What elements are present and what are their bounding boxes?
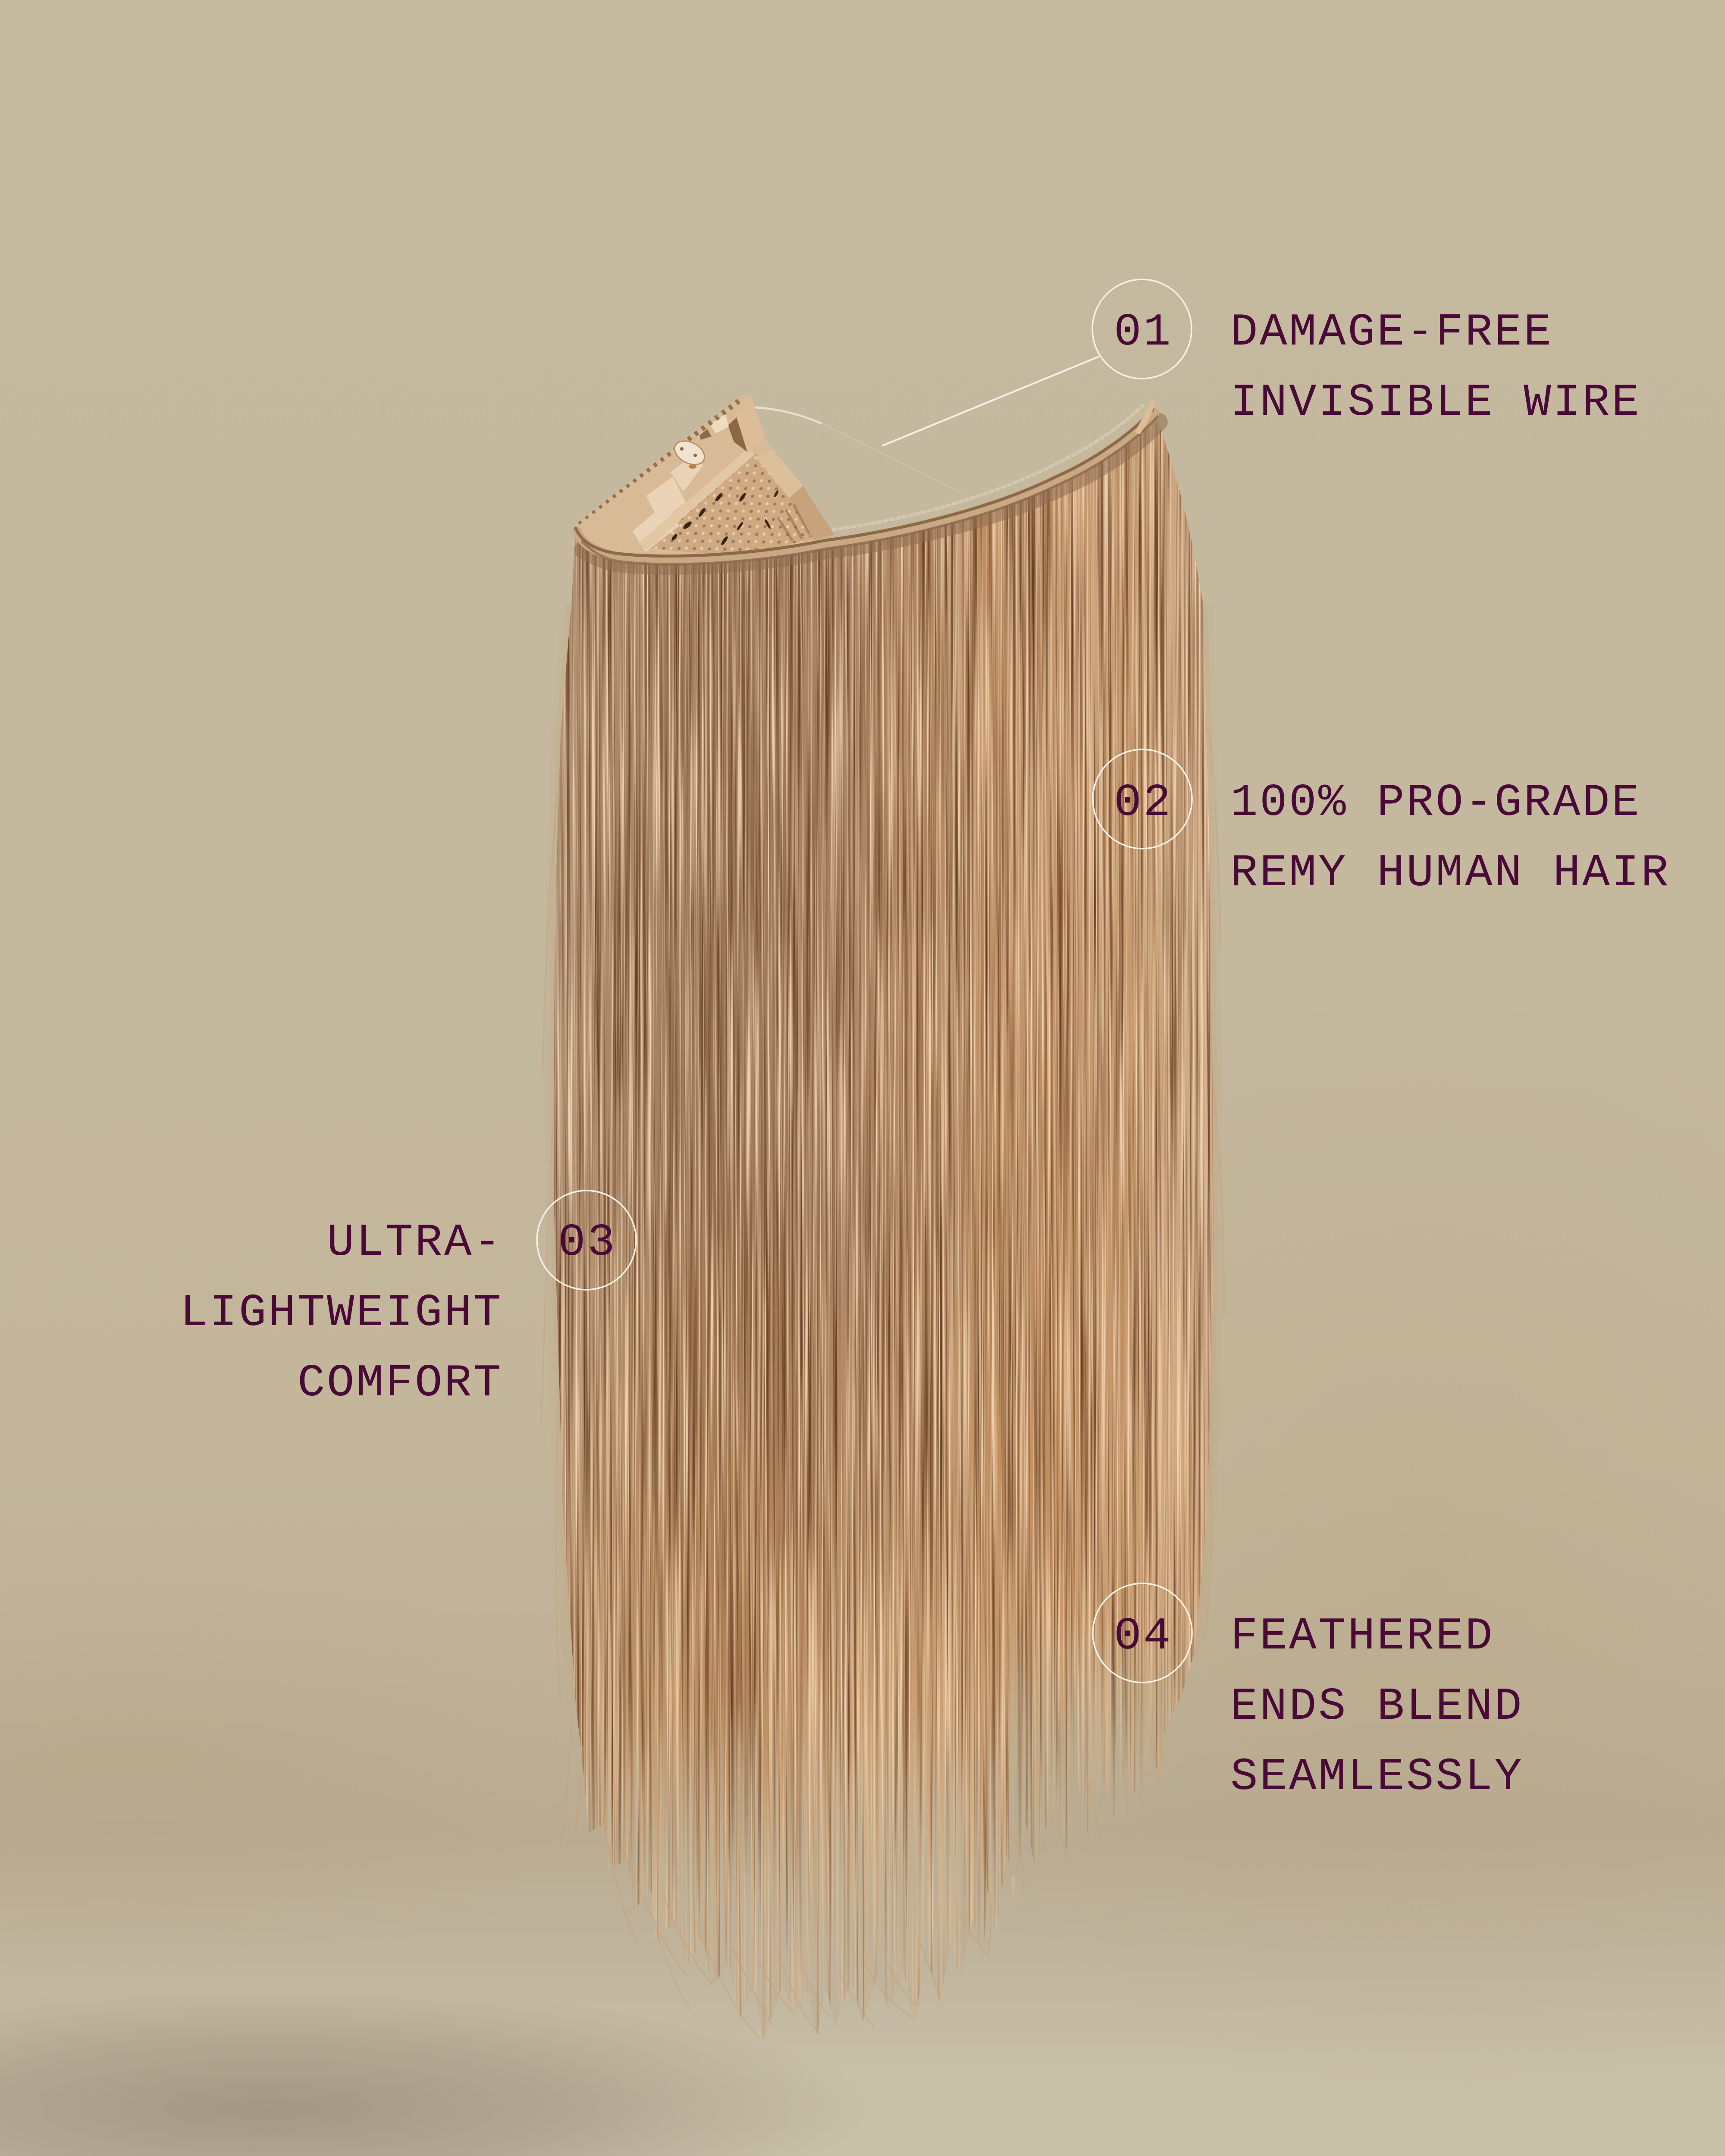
number badge 04: 04 [1114,1611,1173,1662]
number badge 02 [1093,749,1192,849]
label 01: INVISIBLE WIRE [1230,377,1641,429]
label 03: ULTRA- [327,1217,503,1269]
leader line from callout 01 to wire [882,357,1099,446]
label 02: REMY HUMAN HAIR [1230,847,1670,899]
label 04: SEAMLESSLY [1230,1751,1524,1803]
number badge 01 [1092,279,1192,379]
callout 03: ultra-lightweight comfort [180,1191,636,1409]
wire loop and faint wire [756,407,964,494]
soft halo along the hair edges [554,604,1214,1703]
callout 04: feathered ends blend seamlessly [1093,1583,1524,1803]
label 04: FEATHERED [1230,1611,1494,1662]
label 03: COMFORT [298,1357,503,1409]
hair extension product [540,279,1225,2040]
number badge 03 [537,1191,636,1290]
number badge 04 [1093,1583,1192,1683]
callout 01: damage-free invisible wire [1092,279,1641,429]
hair strands body [474,345,1294,2113]
label 03: LIGHTWEIGHT [180,1287,503,1339]
clip: white comb tab [671,436,709,470]
callout 02: remy human hair [1093,749,1670,899]
label 04: ENDS BLEND [1230,1681,1524,1733]
weft seam along the top of the hair [576,403,1160,566]
clip base with net interior [575,394,834,558]
flyaway strands at edges and tips [541,733,1224,2038]
number badge 02: 02 [1114,777,1173,829]
label 02: 100% PRO-GRADE [1230,777,1641,829]
number badge 03: 03 [558,1217,617,1269]
number badge 01: 01 [1114,307,1173,358]
label 01: DAMAGE-FREE [1230,307,1553,358]
